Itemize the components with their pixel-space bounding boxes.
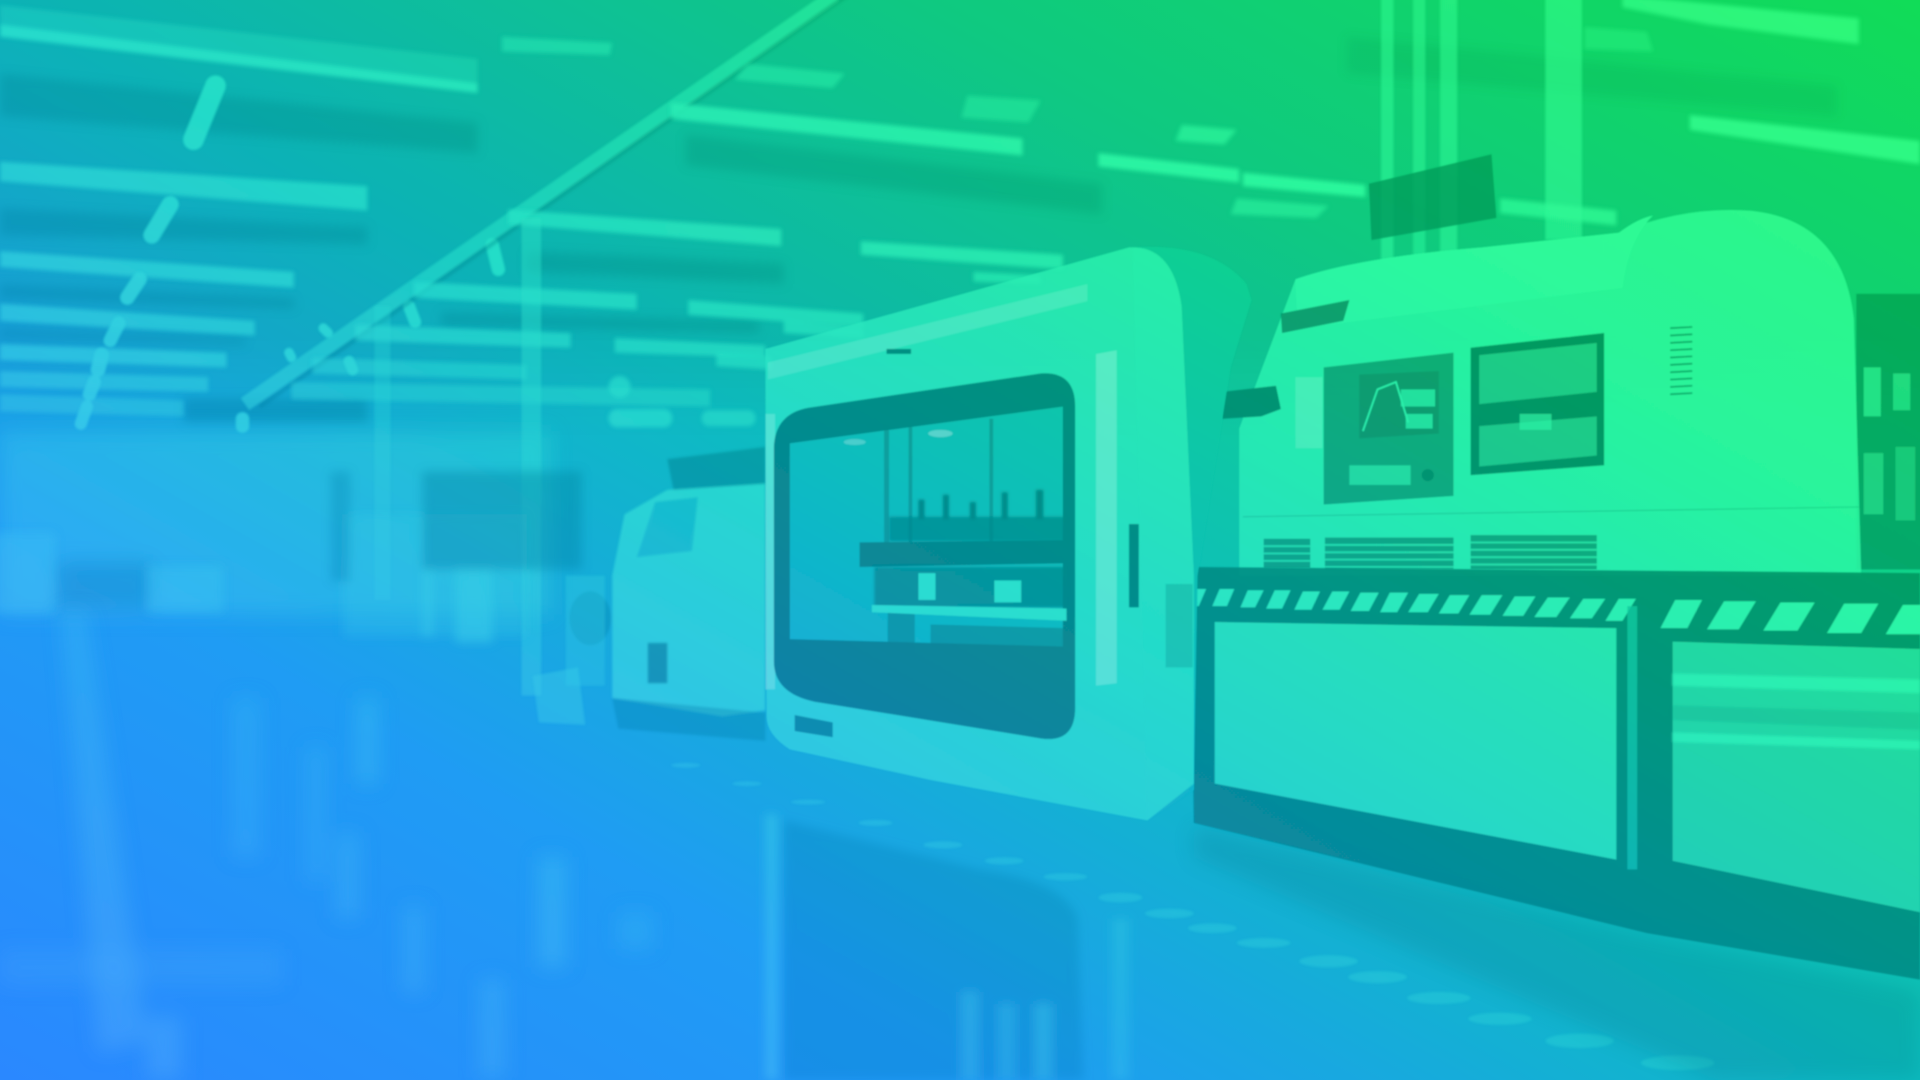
top readout [1281,300,1349,333]
left light panel [1215,622,1616,860]
right edge equipment rack [1856,294,1920,569]
front cabinet machine [765,247,1251,820]
ceiling lights, left rows [0,5,478,416]
wall display [1222,386,1281,419]
lower vents [1264,535,1597,569]
ceiling shading [0,0,1920,435]
ceiling dark beams [0,37,1837,422]
dark frame [1190,567,1920,980]
bottles on shelf [889,490,1065,541]
conveyor table [1190,567,1920,980]
frame post spring [1627,606,1637,869]
right light panel [1673,642,1920,912]
base slot [795,715,833,737]
logo mark [887,349,911,354]
controller box on tower [1369,154,1496,240]
ceiling dash lights [81,86,498,426]
body seam [1243,507,1859,517]
right panel lines [1673,673,1920,749]
machine hood shade [1296,216,1653,328]
left strip [765,414,775,689]
viewing window [774,373,1075,739]
floor marker dots [671,763,1714,1070]
hazard stripes [1190,589,1920,634]
control panel [1324,353,1453,504]
ceiling lights, center and right rows [291,0,1920,427]
dark lower window band [931,624,1067,673]
touch screen [1471,333,1604,475]
right machine [1222,154,1920,576]
side strip [1096,350,1117,686]
right machine shadow on floor [1194,827,1920,1080]
cabinet side [1133,247,1251,820]
mid-distance machine [533,447,765,741]
back wall [0,431,551,615]
front machine floor reflection [765,814,1129,1080]
left background machines [0,471,582,643]
side vent [1670,327,1692,394]
shelf bars [860,540,1067,567]
cabinet body [765,247,1194,820]
lower shelf contents [874,567,1067,607]
support columns [375,0,1582,696]
window interior [790,407,1063,647]
left grille [1296,377,1322,448]
cabinet top highlight [768,284,1087,380]
overhead pipe [245,0,847,407]
light dots on top [928,430,953,437]
machine body [1239,210,1861,576]
floor reflections [0,612,653,1080]
window interior uprights [884,419,993,655]
door handle [1129,524,1139,607]
side vent panel [1166,584,1193,667]
